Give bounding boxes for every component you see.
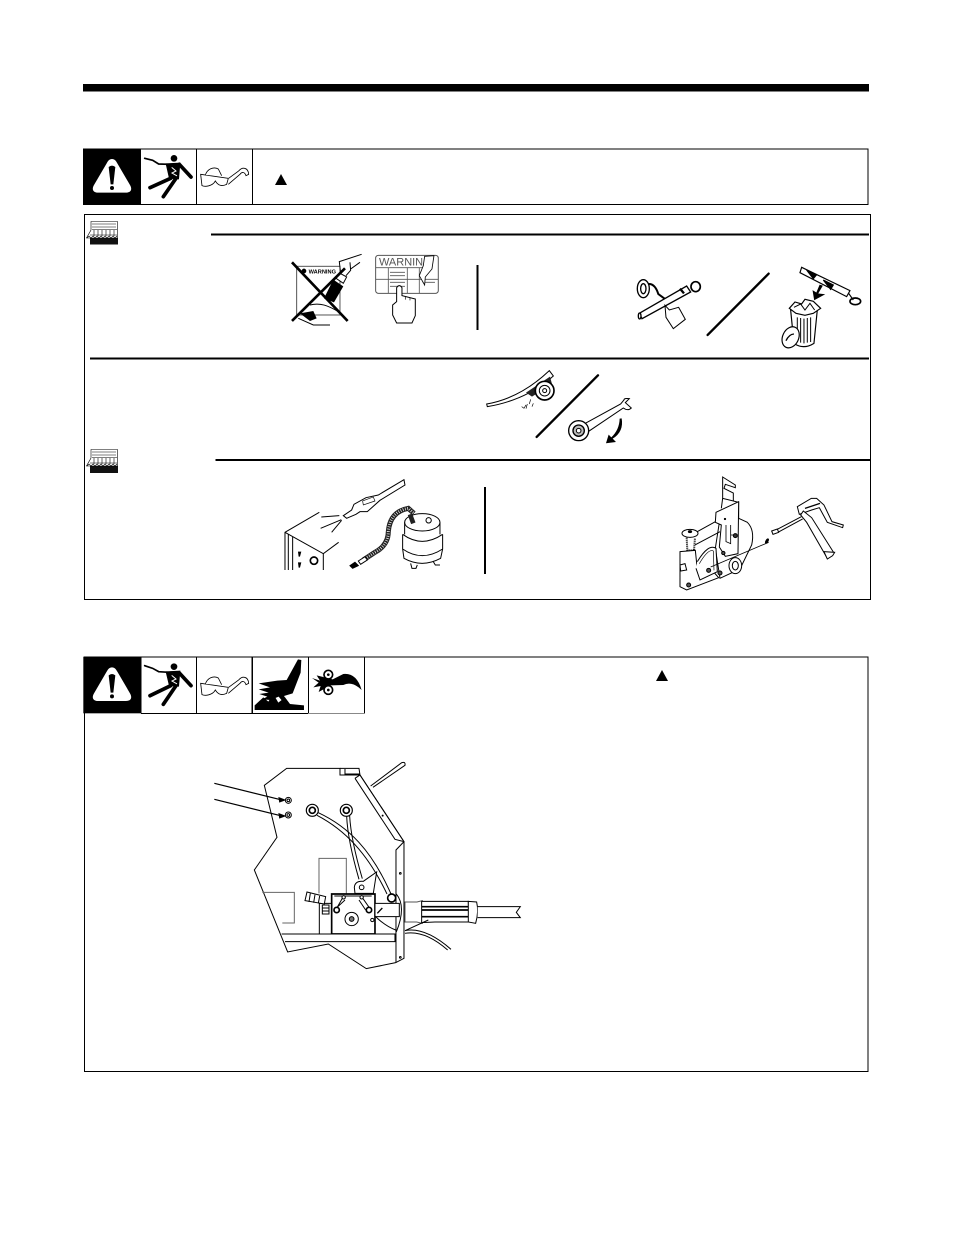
panel: inspection and cleaning procedures — [84, 214, 870, 600]
cables — [317, 813, 396, 902]
diagram: wire feeder interior — [214, 762, 520, 969]
machine side panel — [254, 762, 405, 969]
icon: small triangle symbol — [275, 174, 287, 185]
icon: replace damaged label — [376, 255, 438, 323]
divider: first row heading rule — [211, 234, 869, 236]
divider: third row heading rule — [216, 459, 870, 461]
icon: warning triangle — [83, 149, 141, 204]
icon: calendar 1 — [86, 222, 118, 244]
icon: small triangle symbol — [656, 670, 668, 681]
leader lines to terminals — [214, 783, 285, 818]
divider: third row column rule — [484, 487, 486, 574]
icon: replace damaged label: WARNING — [379, 257, 432, 269]
icon: tape inspection and discard — [637, 267, 861, 351]
icon: electric shock — [145, 155, 191, 197]
internal parts — [262, 858, 346, 923]
terminals — [285, 797, 352, 818]
icon: hot surface hand — [255, 659, 304, 710]
icon cell frame lines — [141, 657, 364, 714]
icon: electric shock — [145, 663, 191, 704]
icon: do not paint over warning label — [292, 254, 362, 325]
divider: first row column rule — [476, 265, 478, 330]
icon: calendar 2 — [86, 450, 118, 473]
icon: safety goggles — [201, 677, 249, 695]
icon: safety goggles — [201, 168, 249, 186]
top heading bar — [83, 84, 869, 92]
icon: drive assembly with grease gun — [680, 477, 843, 590]
panel: second warning section — [83, 657, 868, 1072]
icon: warning triangle — [83, 657, 141, 713]
icon: brush roll and tighten nut — [487, 371, 631, 443]
divider: second row rule — [90, 358, 869, 360]
icon: moving parts rollers and hand — [312, 670, 362, 694]
icon: do not paint over warning label: WARNING — [309, 270, 337, 276]
icon: blow out and vacuum unit — [285, 480, 443, 570]
panel: first warning header — [83, 149, 868, 204]
base tray — [282, 934, 395, 942]
gun connector and cable — [396, 894, 520, 932]
